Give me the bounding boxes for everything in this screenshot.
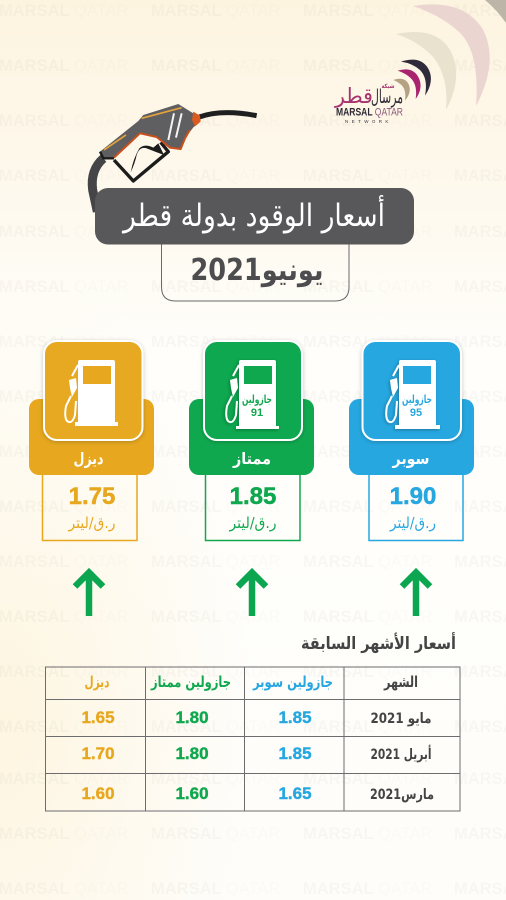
watermark pattern: MARSAL — [0, 443, 70, 461]
icon tile — [362, 341, 461, 440]
logo network line: NETWORK — [345, 119, 392, 124]
watermark pattern: QATAR — [226, 388, 280, 406]
row: April 2021: أبريل 2021 — [370, 745, 432, 763]
watermark pattern: QATAR — [226, 825, 280, 843]
arrow: diesel up — [75, 572, 103, 616]
watermark pattern: MARSAL — [303, 112, 374, 130]
watermark pattern: MARSAL — [303, 223, 374, 241]
watermark pattern: QATAR — [378, 498, 432, 516]
watermark pattern: MARSAL — [303, 278, 374, 296]
watermark pattern: QATAR — [226, 333, 280, 351]
watermark pattern: MARSAL — [151, 825, 222, 843]
watermark pattern: MARSAL — [151, 112, 222, 130]
watermark pattern: MARSAL — [0, 223, 70, 241]
watermark pattern: QATAR — [74, 825, 128, 843]
watermark pattern: MARSAL — [151, 443, 222, 461]
icon: fuel pump 95: 95 — [410, 407, 422, 419]
watermark pattern: QATAR — [226, 223, 280, 241]
name label: ممتاز — [232, 449, 271, 468]
panel: diesel — [29, 341, 154, 540]
watermark pattern: MARSAL — [303, 553, 374, 571]
watermark pattern: QATAR — [226, 663, 280, 681]
watermark pattern: QATAR — [74, 57, 128, 75]
watermark pattern: QATAR — [226, 112, 280, 130]
price: 1.85 — [230, 483, 276, 510]
icon: logo signal arcs — [393, 60, 431, 101]
table header: جازولين ممتاز — [150, 673, 231, 691]
watermark pattern: QATAR — [74, 770, 128, 788]
watermark pattern: QATAR — [74, 663, 128, 681]
watermark pattern: MARSAL — [0, 278, 70, 296]
price: 1.75 — [69, 483, 115, 510]
watermark pattern: QATAR — [226, 770, 280, 788]
icon: fuel pump 91: جازولين — [242, 393, 272, 406]
row: May 2021: 1.65 — [81, 708, 115, 727]
heading: previous months: أسعار الأشهر السابقة — [301, 632, 456, 654]
watermark pattern: QATAR — [378, 553, 432, 571]
watermark pattern: QATAR — [378, 57, 432, 75]
watermark pattern: MARSAL — [303, 333, 374, 351]
arrow: super up — [402, 572, 430, 616]
watermark pattern: QATAR — [226, 553, 280, 571]
row: March 2021: مارس2021 — [370, 787, 434, 803]
price box — [369, 470, 463, 540]
price: 1.90 — [390, 483, 436, 510]
name label: سوبر — [392, 449, 430, 468]
name label: ديزل — [74, 449, 104, 468]
row: May 2021: مايو 2021 — [370, 711, 432, 727]
row: March 2021 — [81, 784, 434, 803]
watermark pattern: QATAR — [226, 880, 280, 898]
watermark pattern: QATAR — [226, 278, 280, 296]
icon: fuel pump 91 — [226, 360, 279, 429]
name band — [29, 399, 154, 475]
watermark pattern: MARSAL — [0, 880, 70, 898]
price box — [206, 470, 300, 540]
watermark pattern: QATAR — [378, 880, 432, 898]
watermark pattern: QATAR — [74, 112, 128, 130]
table grid — [45, 667, 460, 811]
arrow: premium up — [238, 572, 266, 616]
table: previous prices — [45, 667, 460, 811]
watermark pattern: QATAR — [74, 880, 128, 898]
watermark pattern: MARSAL — [0, 770, 70, 788]
watermark pattern: QATAR — [378, 443, 432, 461]
watermark pattern: QATAR — [378, 770, 432, 788]
icon: fuel nozzle — [92, 104, 257, 212]
decorative corner arcs — [396, 0, 506, 110]
row: March 2021: 1.60 — [81, 784, 115, 803]
watermark pattern: QATAR — [74, 718, 128, 736]
icon tile — [44, 341, 142, 440]
logo arabic wordmark: marsal: مرسال — [371, 86, 403, 108]
watermark pattern: MARSAL — [303, 608, 374, 626]
watermark pattern: QATAR — [74, 2, 128, 20]
logo small arabic word: شبكة — [382, 83, 395, 90]
watermark pattern: MARSAL — [0, 167, 70, 185]
watermark pattern: MARSAL — [303, 770, 374, 788]
watermark pattern: MARSAL — [0, 57, 70, 75]
panel: premium 91 — [189, 341, 314, 540]
row: March 2021: 1.65 — [278, 784, 312, 803]
date box — [162, 240, 349, 301]
title banner — [95, 188, 414, 244]
watermark pattern: MARSAL — [0, 553, 70, 571]
table header — [84, 673, 418, 691]
name band — [189, 399, 314, 475]
watermark pattern: QATAR — [226, 498, 280, 516]
watermark pattern: MARSAL — [151, 2, 222, 20]
name band — [349, 399, 474, 475]
watermark pattern: MARSAL — [0, 388, 70, 406]
watermark pattern: MARSAL — [151, 770, 222, 788]
watermark pattern: QATAR — [378, 825, 432, 843]
icon: fuel pump 95 — [386, 360, 440, 429]
watermark pattern: QATAR — [226, 608, 280, 626]
watermark pattern: MARSAL — [0, 718, 70, 736]
watermark pattern: MARSAL — [151, 167, 222, 185]
table header: جازولين سوبر — [252, 673, 333, 691]
watermark pattern: QATAR — [226, 167, 280, 185]
watermark pattern: MARSAL — [151, 223, 222, 241]
icon tile — [204, 341, 302, 440]
watermark pattern: QATAR — [74, 388, 128, 406]
row: May 2021: 1.80 — [175, 708, 209, 727]
table header: ديزل — [84, 673, 110, 691]
row: April 2021: 1.70 — [81, 744, 115, 763]
price box — [42, 470, 137, 540]
watermark pattern: QATAR — [378, 333, 432, 351]
watermark pattern: QATAR — [74, 443, 128, 461]
panel: super 95 — [349, 341, 474, 540]
watermark pattern: QATAR — [74, 608, 128, 626]
watermark pattern: QATAR — [378, 388, 432, 406]
watermark pattern: QATAR — [74, 278, 128, 296]
row: April 2021: 1.80 — [175, 744, 209, 763]
row: May 2021 — [81, 708, 432, 727]
watermark pattern: MARSAL — [151, 57, 222, 75]
watermark pattern: MARSAL — [0, 2, 70, 20]
row: April 2021: 1.85 — [278, 744, 312, 763]
watermark pattern: QATAR — [226, 443, 280, 461]
watermark pattern: QATAR — [74, 553, 128, 571]
row: March 2021: 1.60 — [175, 784, 209, 803]
watermark pattern: QATAR — [74, 498, 128, 516]
watermark pattern: MARSAL — [0, 663, 70, 681]
unit: ر.ق/ليتر — [68, 514, 116, 532]
watermark pattern: MARSAL — [303, 167, 374, 185]
watermark pattern: QATAR — [74, 333, 128, 351]
watermark pattern: MARSAL — [151, 278, 222, 296]
watermark pattern: QATAR — [74, 167, 128, 185]
watermark pattern: QATAR — [378, 718, 432, 736]
watermark pattern: MARSAL — [0, 333, 70, 351]
watermark pattern: MARSAL — [303, 57, 374, 75]
watermark pattern: QATAR — [378, 223, 432, 241]
watermark pattern: MARSAL — [151, 718, 222, 736]
unit: ر.ق/ليتر — [229, 514, 276, 532]
watermark pattern: QATAR — [378, 278, 432, 296]
watermark pattern: MARSAL — [151, 498, 222, 516]
watermark pattern: QATAR — [226, 57, 280, 75]
date text: يونيو2021 — [190, 253, 324, 288]
logo arabic wordmark: qatar: قطر — [334, 84, 373, 108]
row: April 2021 — [81, 744, 432, 763]
watermark pattern: MARSAL — [0, 498, 70, 516]
watermark pattern: MARSAL — [151, 663, 222, 681]
watermark pattern: QATAR — [74, 223, 128, 241]
title text: أسعار الوقود بدولة قطر — [121, 195, 385, 234]
watermark pattern: MARSAL — [303, 388, 374, 406]
watermark pattern: MARSAL — [303, 443, 374, 461]
logo latin wordmark: MARSAL QATAR — [336, 106, 403, 118]
watermark pattern: MARSAL — [303, 825, 374, 843]
watermark pattern: QATAR — [378, 2, 432, 20]
watermark pattern: MARSAL — [0, 608, 70, 626]
unit: ر.ق/ليتر — [389, 514, 436, 532]
watermark pattern: QATAR — [378, 112, 432, 130]
watermark pattern: QATAR — [378, 167, 432, 185]
watermark pattern: MARSAL — [151, 608, 222, 626]
watermark pattern: QATAR — [378, 663, 432, 681]
watermark pattern: MARSAL — [303, 880, 374, 898]
watermark pattern: MARSAL — [0, 825, 70, 843]
icon: fuel pump 91: 91 — [251, 407, 263, 419]
icon: fuel pump — [65, 360, 118, 426]
logo: Marsal Qatar — [334, 60, 431, 124]
icon: fuel pump 95: جازولين — [402, 393, 432, 406]
watermark pattern: MARSAL — [0, 112, 70, 130]
watermark pattern: MARSAL — [151, 880, 222, 898]
watermark pattern: MARSAL — [303, 663, 374, 681]
watermark pattern: MARSAL — [303, 498, 374, 516]
table header: الشهر — [383, 673, 418, 691]
watermark pattern: MARSAL — [303, 2, 374, 20]
watermark pattern: MARSAL — [303, 718, 374, 736]
watermark pattern: MARSAL — [151, 553, 222, 571]
row: May 2021: 1.85 — [278, 708, 312, 727]
watermark pattern: QATAR — [226, 2, 280, 20]
watermark pattern: QATAR — [378, 608, 432, 626]
watermark pattern: MARSAL — [151, 388, 222, 406]
watermark pattern: MARSAL — [151, 333, 222, 351]
watermark pattern: QATAR — [226, 718, 280, 736]
